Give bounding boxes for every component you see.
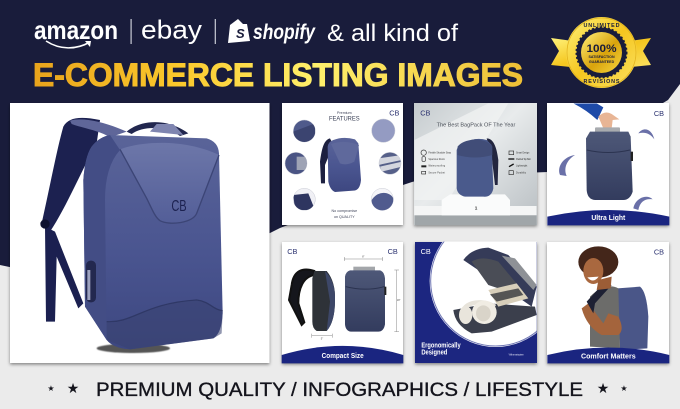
logo: CB bbox=[421, 247, 431, 256]
footer tagline: PREMIUM QUALITY / INFOGRAPHICS / LIFESTYLE bbox=[96, 379, 583, 401]
banner bbox=[547, 347, 669, 363]
logos bbox=[287, 247, 398, 256]
feathers bbox=[559, 129, 654, 210]
footer stars: ★ bbox=[67, 380, 79, 396]
pedestal: 1 bbox=[475, 205, 478, 210]
backpack bbox=[617, 287, 648, 350]
heading: Premium bbox=[337, 111, 352, 115]
features left bbox=[421, 150, 452, 174]
main backpack bbox=[40, 118, 223, 353]
logo: CB bbox=[654, 247, 664, 256]
panel: compact size: 5" bbox=[321, 337, 323, 341]
logo: ebay: ebay bbox=[141, 14, 202, 44]
front view bbox=[345, 267, 386, 332]
logo: shopify: shopify bbox=[253, 21, 316, 44]
side view bbox=[289, 269, 335, 331]
logo on bag: CB bbox=[171, 198, 187, 215]
features left: Flexible Shoulder Strap bbox=[428, 152, 452, 155]
footer stars: ★ bbox=[620, 384, 628, 393]
logo: shopify bag: S bbox=[236, 26, 245, 41]
panel: ergonomically designed bbox=[413, 242, 539, 366]
badge: 100% bbox=[586, 43, 617, 55]
footer note bbox=[332, 209, 357, 219]
caption: Ergonomically bbox=[421, 343, 461, 350]
caption: Designed bbox=[421, 350, 447, 357]
features left: Secure Pocket bbox=[428, 171, 445, 174]
panel: ultra light bbox=[547, 103, 669, 225]
panel: compact size bbox=[282, 242, 403, 363]
header logos bbox=[34, 14, 458, 48]
logo: CB bbox=[389, 109, 400, 118]
features right: Lightweight bbox=[516, 164, 528, 167]
divider bbox=[130, 19, 132, 44]
label: Ultra Light bbox=[591, 215, 626, 222]
badge: REVISIONS bbox=[584, 79, 620, 85]
person bbox=[578, 246, 622, 348]
dimensions bbox=[312, 257, 399, 338]
features left: Spacious Room bbox=[428, 159, 445, 161]
logos: CB bbox=[287, 247, 298, 256]
features right bbox=[508, 151, 531, 175]
panel: compact size: 8" bbox=[362, 255, 365, 259]
features right: Padded Top Belt bbox=[516, 158, 531, 161]
small note: With smart system bbox=[509, 353, 525, 357]
feature circles bbox=[285, 119, 401, 210]
logo: shopify bag bbox=[228, 19, 250, 43]
title: E-COMMERCE LISTING IMAGES bbox=[33, 57, 523, 93]
headphones bbox=[459, 301, 497, 324]
panel: main product bbox=[10, 103, 270, 363]
logo: CB bbox=[654, 109, 664, 118]
footer stars bbox=[47, 380, 628, 396]
badge: SATISFACTION bbox=[588, 55, 615, 59]
panel: compact size: 18" bbox=[397, 298, 401, 302]
ribbon bbox=[551, 38, 651, 68]
panel: best backpack bbox=[414, 103, 537, 225]
divider bbox=[215, 19, 216, 44]
tagline: & all kind of bbox=[327, 20, 458, 47]
caption bbox=[421, 343, 461, 357]
backpack bbox=[320, 138, 361, 192]
badge: UNLIMITED bbox=[584, 23, 620, 29]
banner bbox=[282, 346, 403, 363]
heading bbox=[329, 111, 360, 123]
label: Compact Size bbox=[322, 353, 364, 360]
badge bbox=[551, 17, 651, 88]
footer stars: ★ bbox=[597, 380, 609, 396]
panel: premium features bbox=[282, 103, 403, 225]
badge: GUARANTEED bbox=[589, 60, 615, 64]
heading: The Best BagPack OF The Year bbox=[437, 123, 515, 129]
features right: Durability bbox=[516, 171, 527, 174]
features left: Waterproofing bbox=[428, 165, 446, 168]
panel: comfort matters bbox=[547, 242, 669, 363]
backpack bbox=[457, 138, 498, 197]
logos: CB bbox=[388, 247, 398, 256]
footer note: No compromise bbox=[332, 209, 357, 213]
label: Comfort Matters bbox=[581, 353, 636, 360]
banner bbox=[547, 210, 669, 225]
sleeve bbox=[573, 103, 603, 120]
logo: amazon: amazon bbox=[34, 15, 118, 45]
open backpack bbox=[453, 248, 537, 333]
features right: Smart Design bbox=[516, 152, 530, 155]
backpack bbox=[586, 127, 633, 200]
heading: FEATURES bbox=[329, 116, 360, 123]
hand bbox=[598, 112, 619, 128]
footer stars: ★ bbox=[47, 384, 55, 393]
logo: CB bbox=[420, 109, 431, 118]
footer note: on QUALITY bbox=[334, 215, 355, 219]
